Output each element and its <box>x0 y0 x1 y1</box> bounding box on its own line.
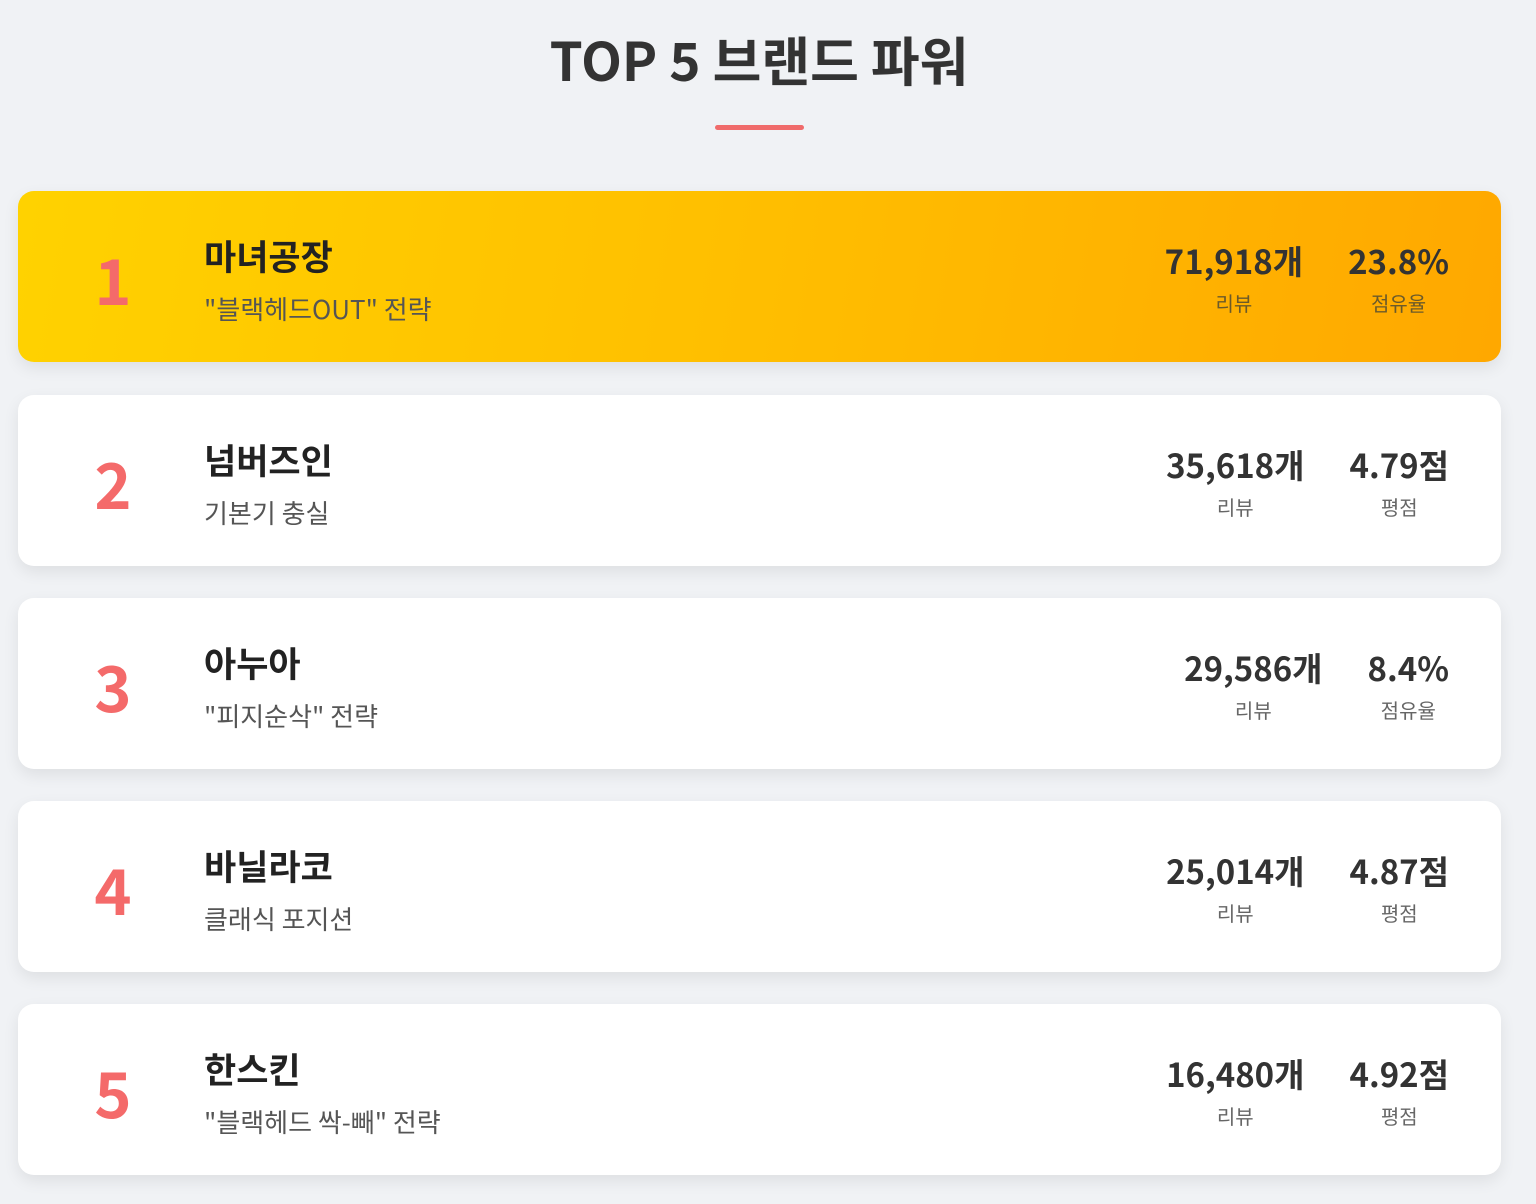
rank number 3: 3 <box>94 640 132 731</box>
stats 3 <box>1184 643 1449 724</box>
stats 2: 리뷰 <box>1217 492 1254 521</box>
stats 3: 8.4% <box>1368 643 1449 691</box>
card: rank 3 <box>18 598 1501 769</box>
brand info 5: 한스킨 <box>204 1043 301 1094</box>
rank number 4: 4 <box>94 843 132 934</box>
brand info 5 <box>204 1043 441 1140</box>
brand info 2: 기본기 충실 <box>204 494 329 531</box>
card: rank 5 <box>18 1004 1501 1175</box>
card: rank 2 <box>18 395 1501 566</box>
stats 5: 16,480개 <box>1166 1049 1304 1097</box>
stats 1: 71,918개 <box>1165 236 1303 284</box>
stats 3: 리뷰 <box>1235 695 1272 724</box>
stats 4: 25,014개 <box>1166 846 1304 894</box>
stats 2 <box>1166 440 1449 521</box>
stats 2: 4.79점 <box>1350 440 1449 488</box>
rank number 1: 1 <box>94 233 132 324</box>
brand info 3: 아누아 <box>204 637 301 688</box>
brand info 1 <box>204 230 432 327</box>
brand info 1: 마녀공장 <box>204 230 333 281</box>
stats 2: 평점 <box>1381 492 1418 521</box>
stats 2: 35,618개 <box>1166 440 1304 488</box>
title underline <box>715 125 804 130</box>
rank number 5: 5 <box>94 1046 132 1137</box>
card: rank 4 <box>18 801 1501 972</box>
brand info 4: 바닐라코 <box>204 840 333 891</box>
stats 5: 4.92점 <box>1350 1049 1449 1097</box>
brand info 4: 클래식 포지션 <box>204 900 353 937</box>
brand info 3 <box>204 637 378 734</box>
brand info 2: 넘버즈인 <box>204 434 333 485</box>
stats 4: 리뷰 <box>1217 898 1254 927</box>
card: rank 1 <box>18 191 1501 362</box>
stats 5 <box>1166 1049 1449 1130</box>
brand info 3: "피지순삭" 전략 <box>204 697 378 734</box>
stats 3: 점유율 <box>1381 695 1436 724</box>
title: TOP 5 브랜드 파워 <box>550 21 968 97</box>
stats 1: 23.8% <box>1348 236 1449 284</box>
stats 1 <box>1165 236 1449 317</box>
brand info 1: "블랙헤드OUT" 전략 <box>204 290 432 327</box>
brand info 4 <box>204 840 353 937</box>
rank number 2: 2 <box>94 437 132 528</box>
stats 4: 4.87점 <box>1350 846 1449 894</box>
stats 1: 리뷰 <box>1215 288 1252 317</box>
stats 5: 리뷰 <box>1217 1101 1254 1130</box>
stats 3: 29,586개 <box>1184 643 1323 691</box>
stats 5: 평점 <box>1381 1101 1418 1130</box>
stats 4: 평점 <box>1381 898 1418 927</box>
stats 1: 점유율 <box>1371 288 1426 317</box>
brand info 2 <box>204 434 333 531</box>
stats 4 <box>1166 846 1449 927</box>
brand info 5: "블랙헤드 싹-빼" 전략 <box>204 1103 441 1140</box>
